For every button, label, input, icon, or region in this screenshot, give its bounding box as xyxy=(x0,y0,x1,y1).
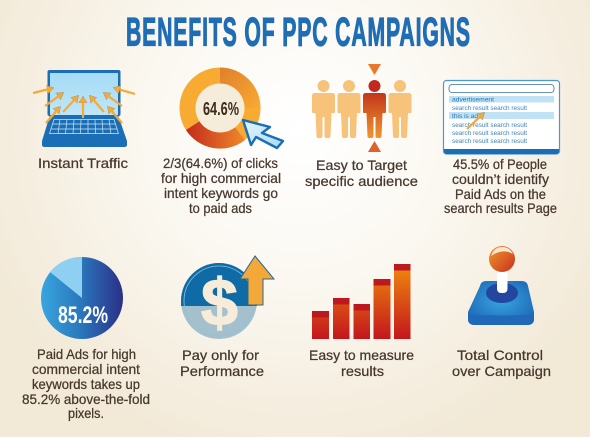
icon: search results browser: this is ad xyxy=(452,113,478,120)
text: above the fold: 85.2% above-the-fold xyxy=(22,391,150,407)
text: search results: search results Page xyxy=(444,200,557,216)
chart: 85.2% pie xyxy=(41,257,123,339)
text: paid clicks xyxy=(161,155,281,216)
text: pay for performance: Performance xyxy=(180,363,264,379)
icon: dollar coin with up arrow: $ xyxy=(201,265,238,339)
icon: search results browser: search result search result xyxy=(452,130,527,137)
panel: target audience xyxy=(305,64,418,189)
chart: bars xyxy=(312,264,410,339)
text: target audience xyxy=(305,157,418,189)
text: pay for performance xyxy=(180,347,264,379)
label: instant traffic: Instant Traffic xyxy=(38,155,128,171)
panel: total control xyxy=(452,246,551,379)
icon: people with target xyxy=(312,64,412,152)
panel: paid clicks xyxy=(161,68,283,216)
text: target audience: Easy to Target xyxy=(316,157,407,173)
text: paid clicks: for high commercial xyxy=(161,170,281,186)
text: pay for performance: Pay only for xyxy=(182,347,259,363)
text: above the fold: Paid Ads for high xyxy=(37,346,136,362)
icon: laptop with arrows xyxy=(33,70,135,147)
icon: cursor arrow xyxy=(243,120,283,148)
chart: 64.6% donut xyxy=(180,68,260,149)
text: above the fold: keywords takes up xyxy=(32,376,140,392)
text: search results xyxy=(444,156,557,216)
text: paid clicks: 2/3(64.6%) of clicks xyxy=(163,155,278,171)
text: paid clicks: to paid ads xyxy=(189,200,252,216)
text: total control: over Campaign xyxy=(452,363,551,379)
icon: joystick xyxy=(468,246,534,325)
icon: search results browser xyxy=(444,80,560,154)
title: BENEFITS OF PPC CAMPAIGNS xyxy=(126,9,470,54)
text: paid clicks: intent keywords go xyxy=(164,185,278,201)
text: above the fold xyxy=(22,346,150,421)
text: search results: couldn’t identify xyxy=(452,171,549,187)
text: measure results xyxy=(309,347,414,379)
icon: search results browser: search result search result xyxy=(452,138,527,145)
icon: search results browser: advertisement xyxy=(452,96,494,104)
icon: search results browser: search result search result xyxy=(452,105,527,112)
text: measure results: results xyxy=(341,363,384,379)
panel: search results xyxy=(444,80,560,216)
text: total control: Total Control xyxy=(457,347,543,363)
icon: search results browser: search result search result xyxy=(452,122,527,129)
text: above the fold: commercial intent xyxy=(32,361,140,377)
text: above the fold: pixels. xyxy=(68,405,104,421)
panel: above the fold xyxy=(22,257,150,421)
panel: measure results xyxy=(309,264,414,379)
text: total control xyxy=(452,347,551,379)
chart: 85.2% pie: 85.2% xyxy=(58,302,108,329)
panel: pay for performance xyxy=(180,256,274,379)
text: search results: 45.5% of People xyxy=(453,156,547,172)
panel: instant traffic xyxy=(33,70,135,171)
text: search results: Paid Ads on the xyxy=(455,186,546,202)
chart: 64.6% donut: 64.6% xyxy=(203,99,239,119)
text: target audience: specific audience xyxy=(305,173,418,189)
text: measure results: Easy to measure xyxy=(309,347,414,363)
